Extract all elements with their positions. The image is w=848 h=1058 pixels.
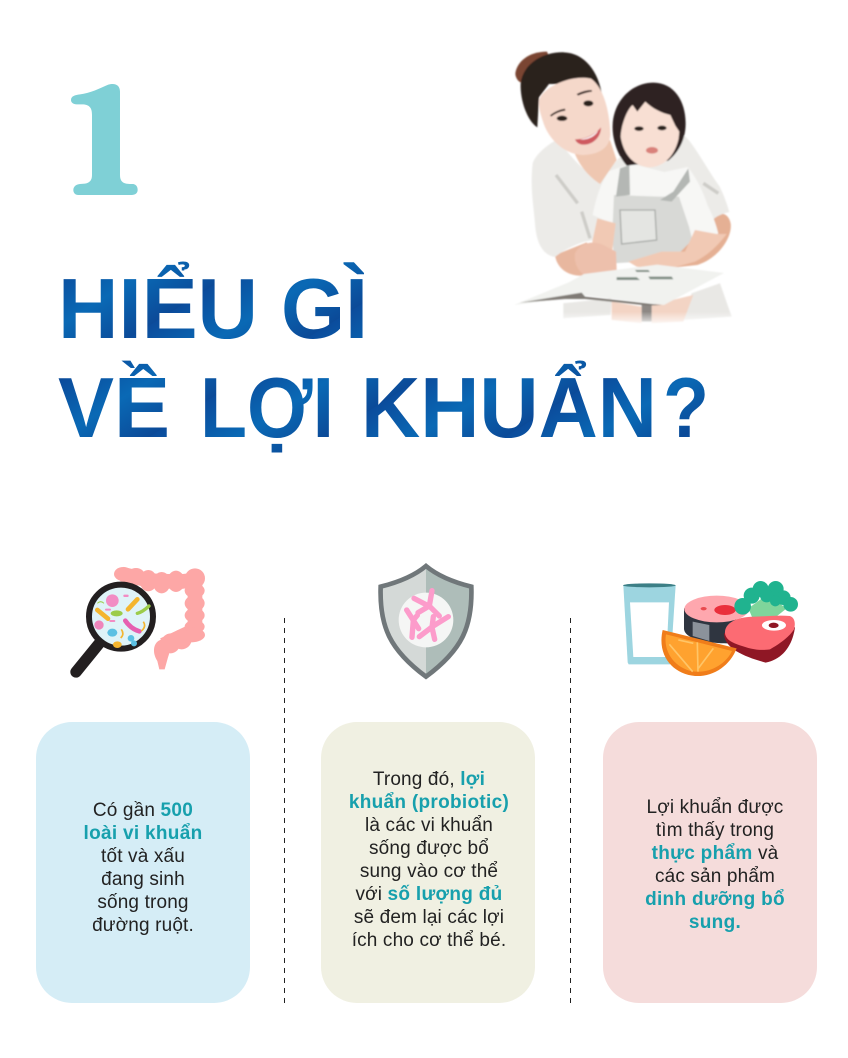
panel: probiotic definition [321,722,535,1003]
title: VỀ [58,360,170,456]
shield border [381,566,471,677]
panel: where probiotics are found: Lợi khuẩn được [647,797,783,818]
child's shirt [593,164,718,242]
mother's hair [521,52,602,127]
panel: probiotic definition: với số lượng đủ [355,884,503,905]
panel: where probiotics are found: dinh dưỡng bổ [645,889,785,910]
glass of milk [623,585,676,664]
broccoli [748,595,787,622]
title: ? [663,361,709,456]
title: KHUẨN [361,360,657,456]
icon: milk and foods [623,581,798,676]
photo: mother and child reading a book [514,52,737,327]
panel: where probiotics are found: sung. [689,912,741,933]
shield body [381,566,426,677]
book [514,265,724,305]
magnifier handle [76,643,99,672]
number 1 [71,84,138,195]
legs [563,283,732,320]
icon: magnifier over intestine [76,567,205,672]
mother's left arm [555,242,603,276]
mother's face [539,78,610,155]
white circle [399,593,453,647]
panel: where probiotics are found: tìm thấy trong [656,820,774,841]
panel: probiotic definition: sung vào cơ thể [360,861,498,882]
panel: probiotic definition: sẽ đem lại các lợi [354,907,504,928]
panel: 500 species of bacteria [36,722,250,1003]
child's hair [613,83,686,166]
dashed dividers [284,618,570,1008]
salmon steak [684,608,744,643]
icon: shield with probiotics [381,566,471,677]
panel: probiotic definition: là các vi khuẩn [365,815,493,836]
panel: 500 species of bacteria: đang sinh [101,869,185,890]
panel: 500 species of bacteria: tốt và xấu [101,846,185,867]
title: LỢI [200,361,334,456]
panel: probiotic definition: ích cho cơ thể bé. [352,930,506,951]
panel: 500 species of bacteria: loài vi khuẩn [84,823,202,844]
title: HIỂU [58,261,258,357]
magnifier lens [89,585,153,649]
panel: probiotic definition: khuẩn (probiotic) [349,792,509,813]
panel: 500 species of bacteria: sống trong [97,892,189,913]
child's overalls [612,195,692,263]
intestine [114,567,205,669]
panel: where probiotics are found: các sản phẩm [655,866,775,887]
child's face [621,102,679,167]
panel: 500 species of bacteria: Có gần 500 [93,800,193,821]
mother's eyes and mouth [557,116,567,121]
mother's shirt [532,134,729,257]
panel: where probiotics are found: thực phẩm và [652,843,779,864]
mother's neck [574,140,617,184]
panel: where probiotics are found [603,722,817,1003]
title [58,261,709,456]
panel: probiotic definition: Trong đó, lợi [373,769,485,790]
panel: probiotic definition: sống được bổ [369,838,489,859]
child's arms and hands [592,218,727,270]
orange slice [661,630,737,676]
pink bacteria [407,591,448,639]
panel: 500 species of bacteria: đường ruột. [92,915,194,936]
microbes [94,594,149,648]
title: GÌ [281,262,368,357]
mother's right arm [667,214,731,268]
mother's hair bun [515,52,550,82]
meat [724,618,795,663]
